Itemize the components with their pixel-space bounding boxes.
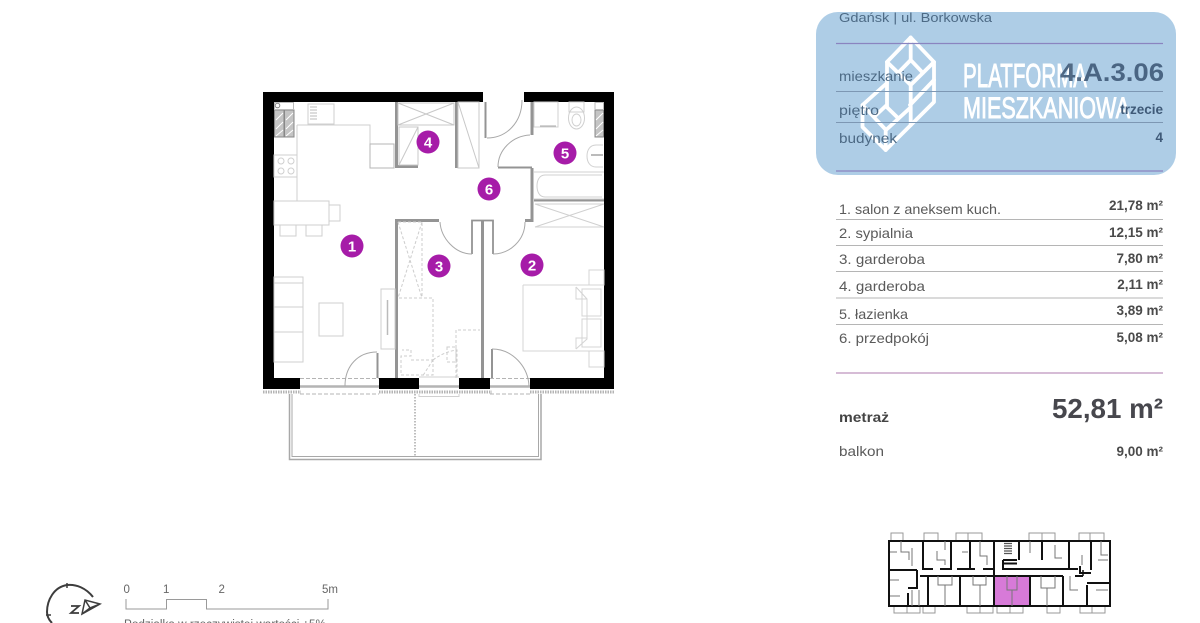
balcony [290, 394, 541, 460]
room row 2: 2. sypialnia [839, 225, 913, 241]
apartment row: mieszkanie [839, 68, 913, 84]
floor row: trzecie [1120, 102, 1163, 117]
room row 6: 6. przedpokój [839, 330, 929, 346]
room number 5: 5 [561, 146, 569, 162]
wardrobe dashed furniture [398, 222, 480, 378]
room row 2 [839, 225, 1163, 241]
room number 4: 4 [424, 134, 433, 152]
room row 3: 3. garderoba [839, 251, 925, 267]
room number 4 [416, 130, 440, 154]
room number 1 [340, 234, 364, 258]
building row: budynek [839, 130, 898, 146]
balcony area: 9,00 m² [1116, 444, 1163, 459]
city and street: Gdańsk | ul. Borkowska [839, 10, 993, 25]
kitchen and living room furniture [274, 104, 395, 362]
room number 3: 3 [435, 258, 443, 276]
scale bar [124, 584, 338, 623]
room row 4 [839, 277, 1164, 294]
outer walls [889, 541, 1110, 606]
balconies [891, 533, 1105, 613]
exterior walls [263, 92, 614, 389]
logo wordmark: PLATFORMA [963, 57, 1087, 94]
building row [839, 130, 1163, 146]
room area table [836, 198, 1164, 346]
main walls [888, 541, 1110, 606]
total area: 52,81 m² [1052, 393, 1163, 424]
room row 6: 5,08 m² [1116, 330, 1163, 345]
wardrobe fittings [398, 102, 479, 168]
room row 6 [839, 330, 1163, 346]
room number 5 [554, 142, 576, 164]
room number 6: 6 [485, 182, 493, 198]
room row 5 [839, 303, 1163, 322]
floor row: piętro [839, 102, 879, 118]
icon: isometric building [862, 38, 934, 150]
icon: compass north arrow [46, 583, 100, 623]
apartment row [839, 59, 1164, 87]
total area: metraż [839, 410, 889, 425]
room row 1 [839, 198, 1163, 217]
room number 3 [428, 254, 450, 278]
room row 2: 12,15 m² [1109, 225, 1163, 240]
interior walls [378, 102, 604, 378]
room partitions [890, 541, 1108, 606]
room row 4: 2,11 m² [1117, 277, 1164, 292]
scale bar: 0 [124, 584, 130, 596]
facade line and window frames [263, 377, 614, 396]
room number 2: 2 [528, 258, 536, 274]
door swings [345, 100, 530, 386]
watermark logo [862, 38, 1130, 150]
scale bar: 2 [218, 584, 225, 596]
highlighted apartment [994, 576, 1030, 606]
room row 4: 4. garderoba [839, 278, 925, 294]
room row 1: 21,78 m² [1109, 198, 1163, 213]
stairs [1004, 544, 1012, 554]
bedroom furniture [523, 270, 604, 367]
scale bar: 5m [322, 584, 338, 596]
balcony area [839, 443, 1163, 459]
total area [839, 393, 1163, 425]
building key plan [888, 533, 1110, 613]
room row 5: 5. łazienka [839, 306, 908, 322]
building row: 4 [1155, 130, 1163, 145]
watermark logo: MIESZKANIOWA [963, 92, 1130, 125]
floor row [839, 102, 1163, 118]
room number 2 [520, 254, 544, 276]
ventilation shafts [274, 102, 604, 137]
floor plan [263, 92, 614, 460]
balcony area: balkon [839, 443, 884, 459]
scale bar: 1 [163, 584, 169, 596]
room row 1: 1. salon z aneksem kuch. [839, 201, 1001, 217]
room number 6 [478, 178, 500, 200]
totals [836, 373, 1163, 459]
room row 3 [839, 251, 1163, 267]
room row 3: 7,80 m² [1116, 251, 1163, 266]
room row 5: 3,89 m² [1116, 303, 1163, 318]
apartment row: 4.A.3.06 [1060, 59, 1164, 87]
room number 1: 1 [348, 238, 356, 256]
panel: apartment details [816, 10, 1176, 175]
bathroom fixtures [534, 102, 604, 227]
